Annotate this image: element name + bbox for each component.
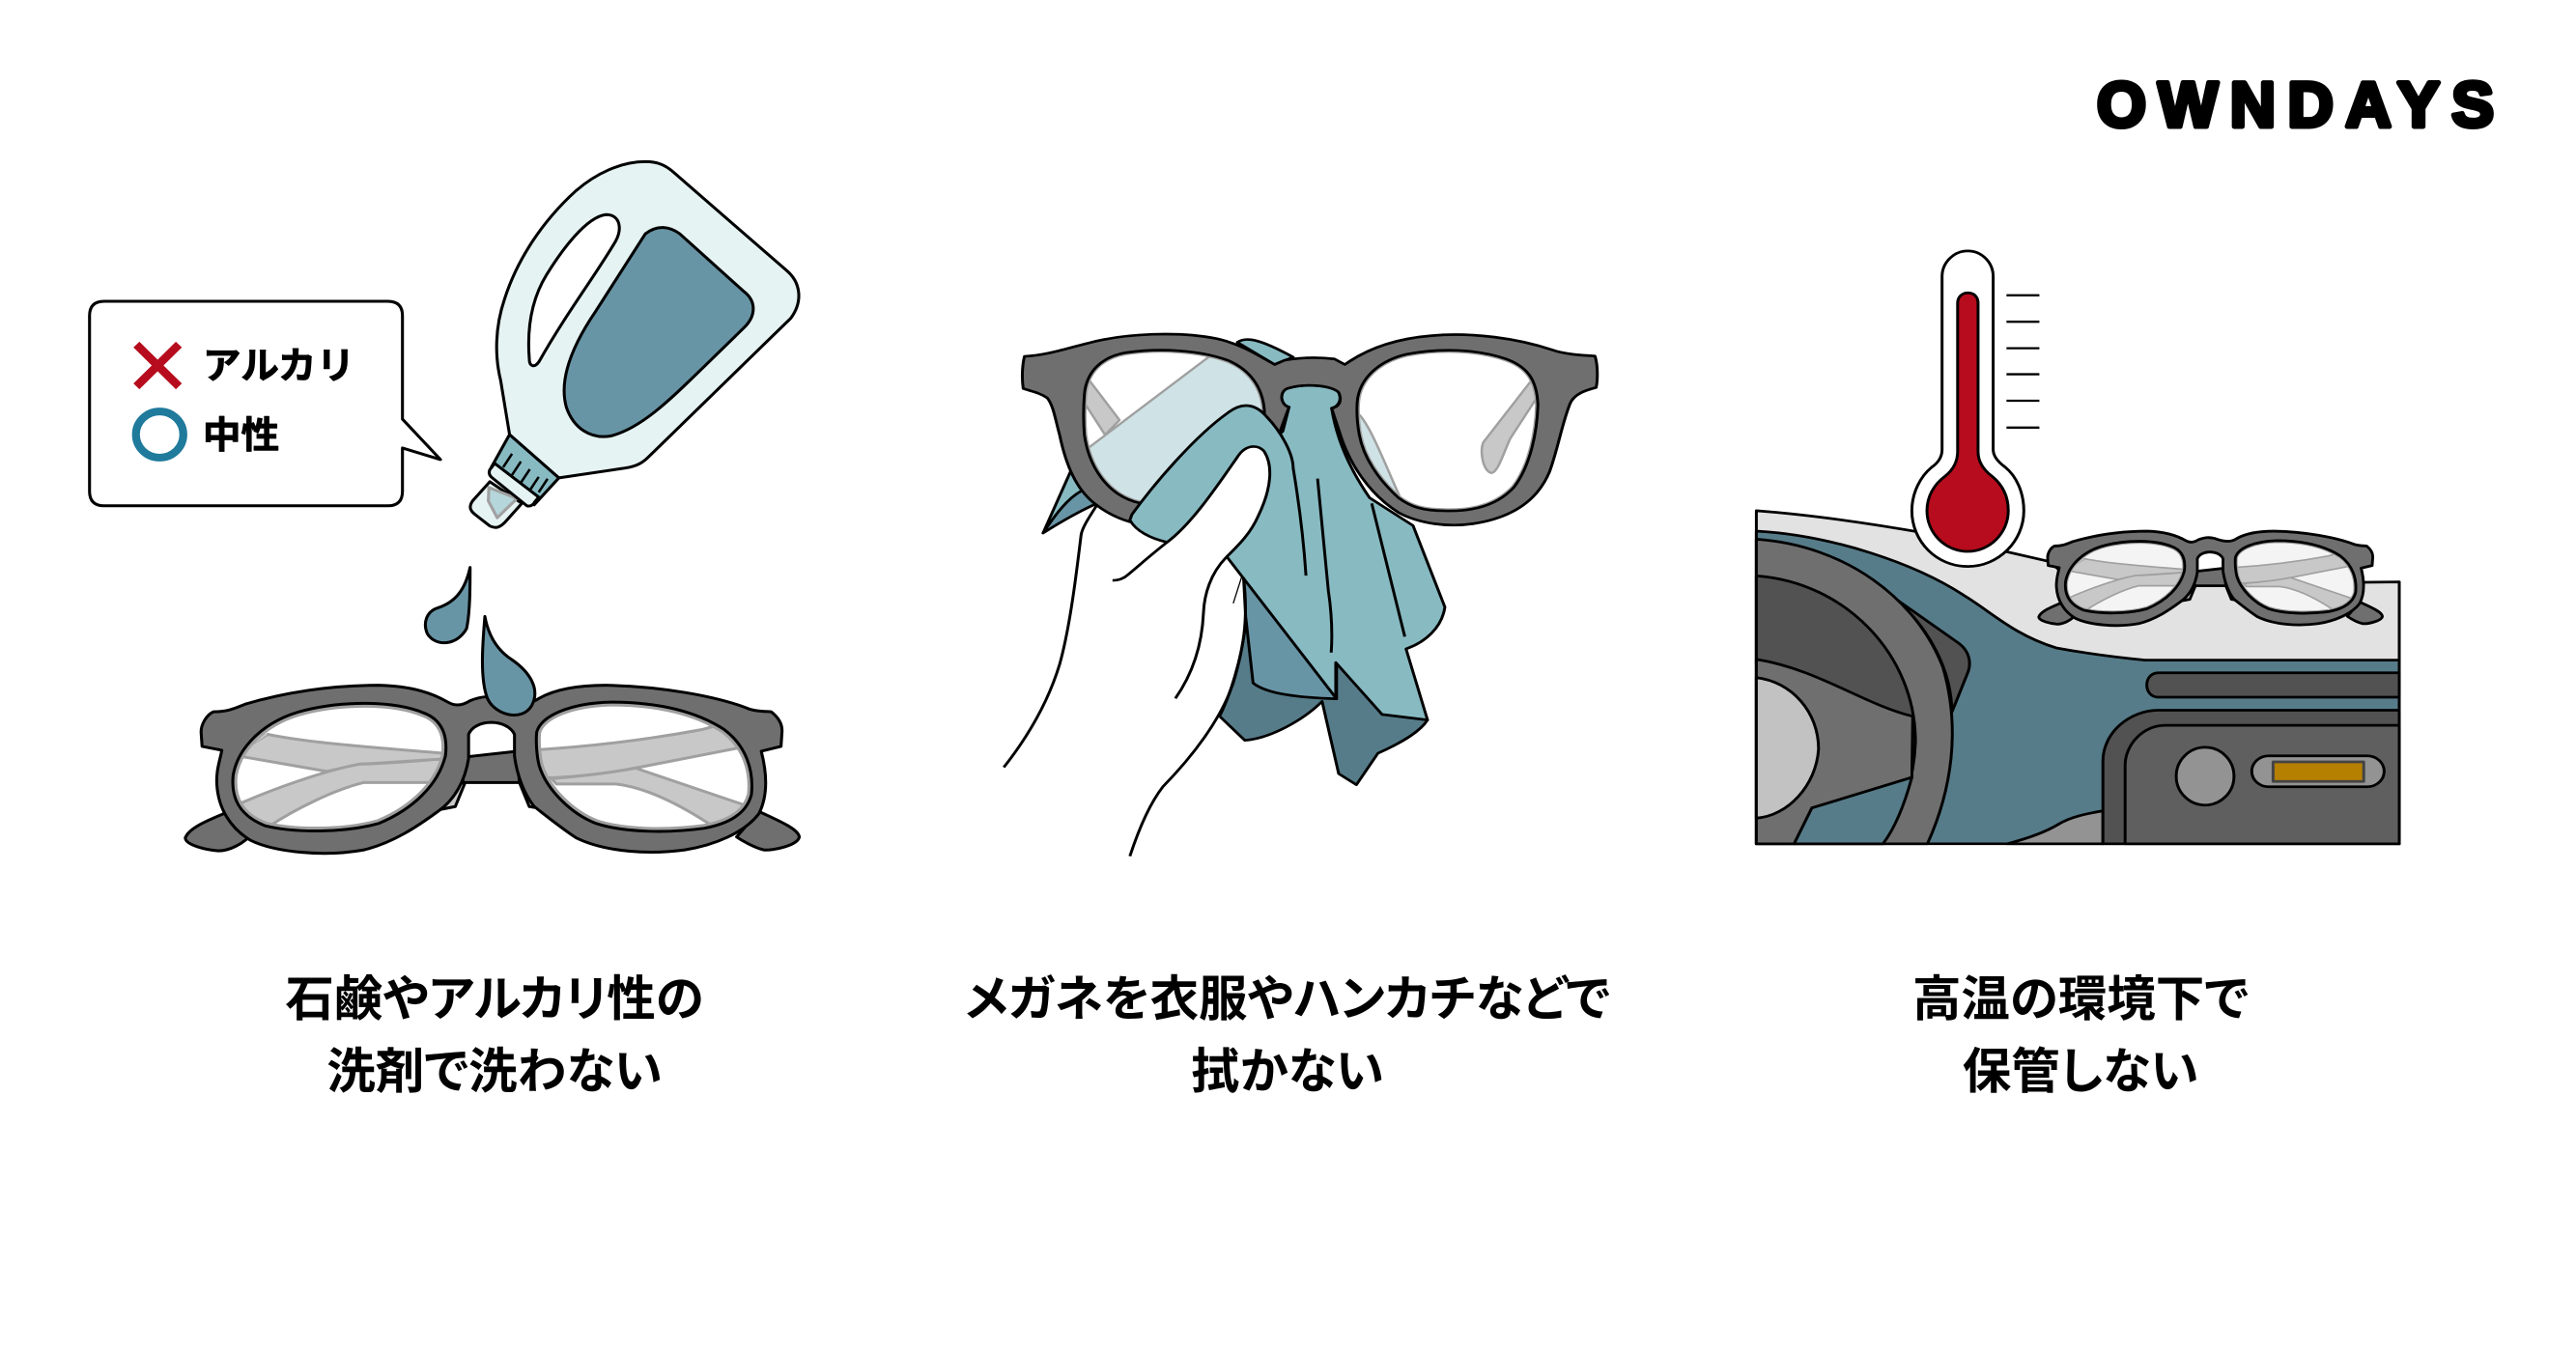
instrument hood bbox=[1892, 596, 1969, 713]
panel: detergent illustration bbox=[90, 161, 800, 854]
cloth creases bbox=[1317, 479, 1404, 653]
icon: hand bbox=[1004, 446, 1270, 857]
cloth: fold over thumb bbox=[1130, 406, 1306, 576]
steering wheel bbox=[1756, 539, 1952, 844]
icon: glasses on dashboard bbox=[2039, 531, 2383, 626]
icon: glasses on table bbox=[185, 686, 800, 854]
logo: OWNDAYS: OWNDAYS bbox=[2097, 70, 2494, 140]
icon: drop on glasses bbox=[482, 616, 535, 716]
panel: wiping with clothing illustration bbox=[1004, 334, 1598, 857]
caption: heat: 高温の環境下で bbox=[1912, 971, 2249, 1026]
panel: car dashboard illustration bbox=[1756, 251, 2399, 844]
icon: red cross bbox=[136, 345, 179, 386]
icon: detergent bottle bbox=[470, 161, 799, 527]
speech bubble: alkaline vs neutral bbox=[90, 301, 440, 506]
icon: drops bbox=[425, 568, 470, 643]
dashboard body bbox=[1756, 531, 2399, 844]
floor bbox=[2007, 811, 2103, 844]
caption: clothing: 拭かない bbox=[1191, 1044, 1384, 1099]
caption: soap bbox=[285, 971, 704, 1099]
icon: thermometer bbox=[1911, 251, 2039, 567]
icon: blue circle bbox=[136, 411, 184, 458]
label: alkaline: アルカリ bbox=[203, 346, 355, 387]
caption: clothing: メガネを衣服やハンカチなどで bbox=[965, 971, 1610, 1026]
caption: soap: 洗剤で洗わない bbox=[326, 1044, 663, 1099]
cloth: behind glasses bbox=[1043, 339, 1445, 785]
caption: soap: 石鹸やアルカリ性の bbox=[285, 971, 704, 1026]
icon: glasses front view bbox=[1022, 334, 1598, 526]
caption: heat bbox=[1912, 971, 2249, 1099]
label: neutral: 中性 bbox=[203, 414, 279, 457]
air vent bbox=[2147, 673, 2399, 697]
caption: clothing bbox=[965, 971, 1610, 1099]
dashboard top bbox=[1756, 511, 2399, 663]
caption: heat: 保管しない bbox=[1963, 1044, 2198, 1099]
centre console bbox=[2103, 710, 2399, 844]
